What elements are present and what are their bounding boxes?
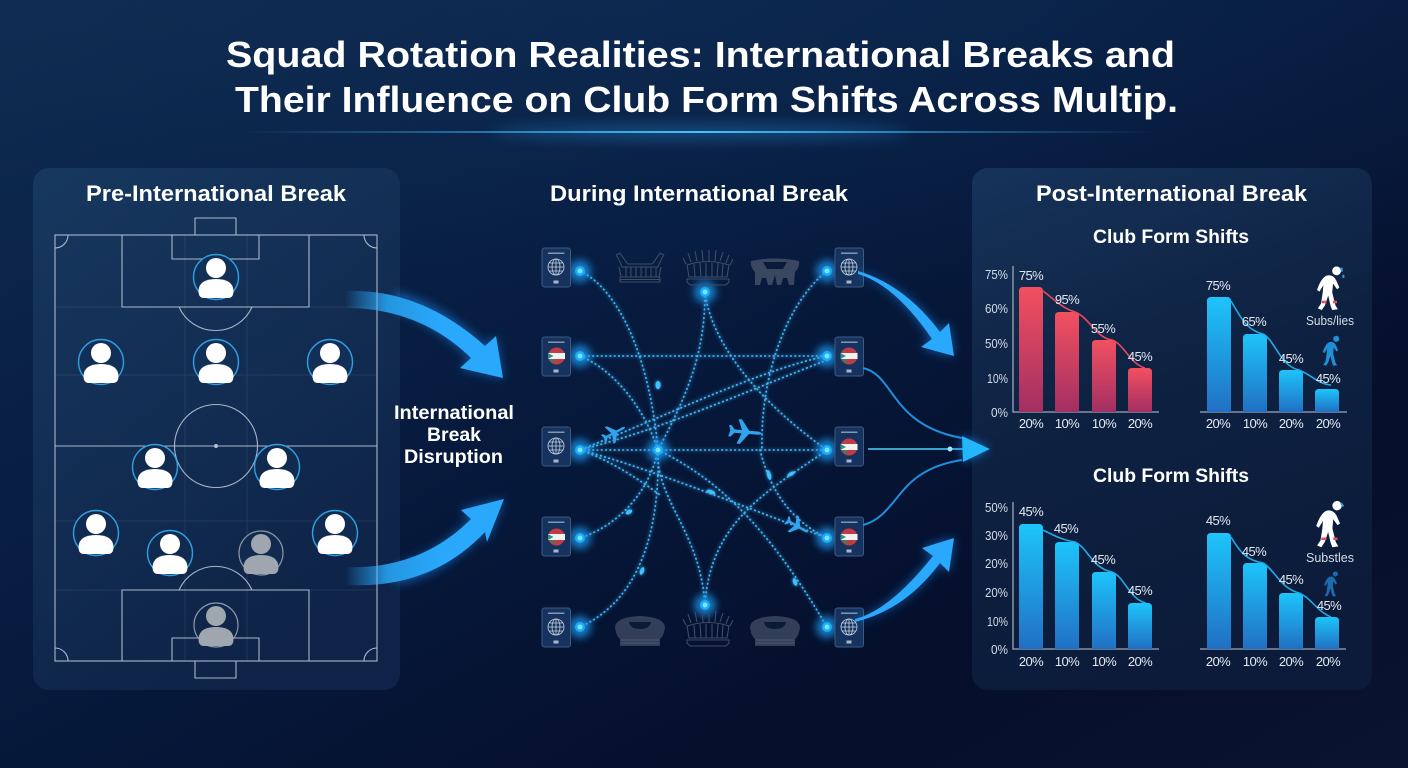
title: Squad Rotation Realities: International Breaks and (226, 34, 1175, 75)
player: left midfielder (78, 340, 124, 384)
player: right midfielder (308, 340, 352, 384)
flight network (580, 271, 827, 627)
bar chart: red upper left: 20% (1128, 416, 1153, 431)
bar chart: red upper left: 75% (1019, 268, 1044, 283)
bar chart: blue lower left: 10% (1092, 654, 1117, 669)
icon: injured player white, lower (1316, 501, 1343, 547)
bar chart: blue lower left: 45% (1054, 521, 1079, 536)
heading: club form shifts lower: Club Form Shifts (1093, 466, 1249, 487)
bar chart: blue lower left: 10% (987, 614, 1008, 629)
bar chart: blue lower right: 45% (1317, 598, 1342, 613)
bar chart: blue lower right (1200, 513, 1346, 669)
icon: plane left (599, 419, 629, 447)
arrow: pre-break to disruption upper (345, 290, 503, 378)
label: international break disruption: International (394, 403, 514, 424)
bar chart: red upper left: 20% (1019, 416, 1044, 431)
icon: injured player blue, upper (1323, 336, 1339, 366)
arrow: curve upper into centre (863, 368, 962, 438)
bar chart: blue upper right: 20% (1316, 416, 1341, 431)
bar chart: blue lower left: 20% (985, 585, 1008, 600)
icon: plane centre (728, 418, 762, 446)
bar chart: blue upper right: 20% (1206, 416, 1231, 431)
bar chart: red upper left: 50% (985, 336, 1008, 351)
bar chart: red upper left: 0% (991, 405, 1008, 420)
player: goalkeeper top (194, 254, 238, 300)
bar chart: blue upper right: 65% (1242, 314, 1267, 329)
bar chart: blue lower left: 45% (1019, 504, 1044, 519)
bar chart: blue lower right: 10% (1243, 654, 1268, 669)
label: substitutes lower: Substles (1306, 550, 1354, 565)
player: defender left (148, 530, 192, 576)
label: international break disruption (394, 403, 514, 468)
bar chart: red upper left: 10% (987, 371, 1008, 386)
player: centre midfielder (194, 340, 238, 384)
player: inner right (254, 444, 300, 490)
arrow: passport to post-break top (858, 271, 954, 356)
heading: during international break: During International Break (550, 181, 849, 206)
bar chart: blue lower left: 20% (1019, 654, 1044, 669)
bar chart: blue lower left: 45% (1091, 552, 1116, 567)
heading: club form shifts upper: Club Form Shifts (1093, 227, 1249, 248)
bar chart: blue upper right: 45% (1279, 351, 1304, 366)
panel: post-international break (972, 168, 1372, 690)
arrow: passport to post-break bottom (855, 538, 954, 622)
player: rotated out goalkeeper (194, 603, 238, 647)
label: substitutes upper: Subs/lies (1306, 313, 1354, 328)
bar chart: blue lower left: 50% (985, 500, 1008, 515)
bar chart: blue lower right: 45% (1206, 513, 1231, 528)
bar chart: blue lower left: 0% (991, 642, 1008, 657)
bar chart: blue upper right: 10% (1243, 416, 1268, 431)
label: international break disruption: Break (427, 425, 481, 446)
bar chart: blue upper right: 45% (1316, 371, 1341, 386)
network nodes (569, 260, 838, 638)
bar chart: blue lower left: 20% (1128, 654, 1153, 669)
football pitch (55, 218, 377, 678)
bar chart: blue lower left: 30% (985, 528, 1008, 543)
bar chart: red upper left: 45% (1128, 349, 1153, 364)
bar chart: blue lower left: 45% (1128, 583, 1153, 598)
icon: plane right (782, 512, 812, 540)
panel: pre-international break (33, 168, 400, 690)
arrow: centre into post-break (868, 436, 990, 462)
player: wide right (312, 510, 358, 556)
bar chart: red upper left: 75% (985, 267, 1008, 282)
bar chart: blue lower right: 20% (1279, 654, 1304, 669)
player: wide left (74, 510, 118, 556)
bar chart: red upper left: 10% (1092, 416, 1117, 431)
player: inner left (132, 444, 178, 490)
player: rotated out defender (239, 531, 283, 575)
label: international break disruption: Disruption (404, 447, 503, 468)
bar chart: red upper left: 95% (1055, 292, 1080, 307)
bar chart: blue lower left (985, 500, 1159, 669)
icon: injured player white, upper (1317, 266, 1343, 310)
bar chart: blue lower left: 10% (1055, 654, 1080, 669)
bar chart: red upper left: 10% (1055, 416, 1080, 431)
arrow: curve lower into centre (863, 460, 962, 525)
passports left column (542, 248, 570, 647)
bar chart: red upper left: 60% (985, 301, 1008, 316)
bar chart: blue upper right: 20% (1279, 416, 1304, 431)
stadium icons top (616, 250, 799, 285)
heading: pre-international break: Pre-International Break (86, 181, 347, 206)
bar chart: blue lower left: 20% (985, 556, 1008, 571)
heading: post-international break: Post-International Break (1036, 181, 1308, 206)
title: Their Influence on Club Form Shifts Across Multip. (235, 79, 1178, 120)
bar chart: red upper left: 55% (1091, 321, 1116, 336)
icon: injured player blue, lower (1324, 571, 1338, 596)
bar chart: blue lower right: 20% (1316, 654, 1341, 669)
bar chart: blue upper right: 75% (1206, 278, 1231, 293)
bar chart: red upper left (985, 266, 1159, 431)
bar chart: blue lower right: 45% (1242, 544, 1267, 559)
bar chart: blue upper right (1200, 278, 1347, 431)
bar chart: blue lower right: 20% (1206, 654, 1231, 669)
stadium icons bottom (615, 611, 800, 646)
title (226, 34, 1178, 120)
passports right column (835, 248, 864, 647)
arrow: pre-break to disruption lower (345, 499, 504, 586)
bar chart: blue lower right: 45% (1279, 572, 1304, 587)
